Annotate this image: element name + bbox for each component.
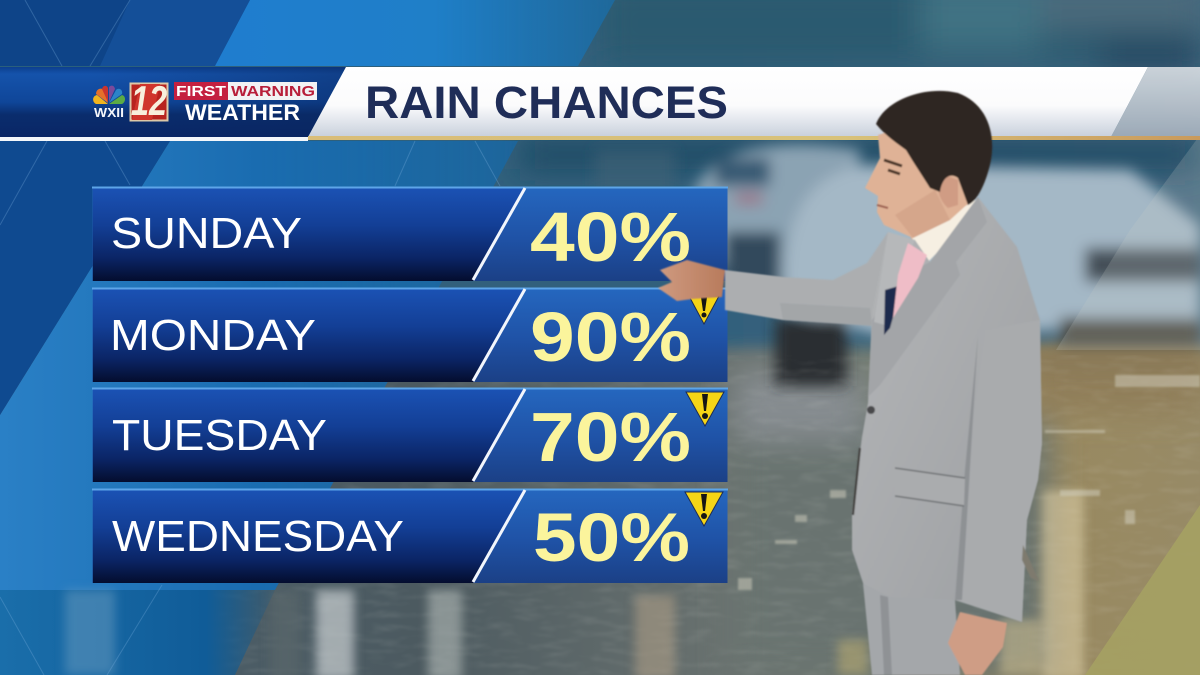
forecast row: Monday: 90% xyxy=(530,298,691,376)
title: RAIN CHANCES xyxy=(365,77,728,128)
icon: warning triangle xyxy=(685,492,723,526)
suit jacket body xyxy=(852,197,1042,622)
trousers xyxy=(863,583,960,675)
shirt collar xyxy=(912,199,977,262)
forecast row: Sunday: 40% xyxy=(530,198,691,276)
background: blue angled graphic overlay xyxy=(0,0,615,675)
hair xyxy=(876,91,992,205)
sleeve arm xyxy=(725,232,888,326)
forecast row: Tuesday: 70% xyxy=(530,398,691,476)
button xyxy=(867,406,875,414)
forecast row: Sunday xyxy=(92,186,728,281)
sleeve shading xyxy=(955,320,1042,622)
icon: warning triangle xyxy=(689,296,719,324)
logo: NBC peacock: WXII xyxy=(94,106,124,120)
header band: logo panel xyxy=(0,67,346,141)
forecast row: Wednesday xyxy=(92,488,728,583)
logo: NBC peacock xyxy=(93,86,125,120)
presenter in grey suit xyxy=(658,91,1042,675)
pointing hand xyxy=(658,260,725,301)
forecast row: Wednesday: WEDNESDAY xyxy=(112,512,404,561)
logo: First Warning Weather xyxy=(174,82,317,125)
logo: First Warning Weather: WARNING xyxy=(231,83,315,100)
rain texture on the wet road xyxy=(0,355,1200,675)
logo: First Warning Weather: FIRST xyxy=(176,83,226,100)
icon: warning triangle xyxy=(686,392,724,426)
logo: channel 12: 12 xyxy=(131,77,167,124)
lower hand xyxy=(948,612,1007,675)
logo: First Warning Weather: WEATHER xyxy=(185,100,300,125)
mouth xyxy=(877,205,888,208)
forecast row: Tuesday: TUESDAY xyxy=(112,411,327,460)
forecast row: Monday xyxy=(92,288,728,382)
forecast row: Wednesday: 50% xyxy=(533,499,690,576)
lapels xyxy=(868,197,987,397)
forecast row: Sunday: SUNDAY xyxy=(111,209,302,258)
tie xyxy=(893,243,927,318)
forecast row: Monday: MONDAY xyxy=(110,311,316,360)
jacket vent edge xyxy=(853,448,860,515)
dark undershirt xyxy=(884,285,902,335)
header band: title panel xyxy=(308,67,1200,140)
face xyxy=(865,120,975,238)
pocket xyxy=(895,468,965,506)
neck xyxy=(905,195,975,255)
eyebrow and eye xyxy=(884,160,902,174)
forecast row: Tuesday xyxy=(92,388,728,482)
